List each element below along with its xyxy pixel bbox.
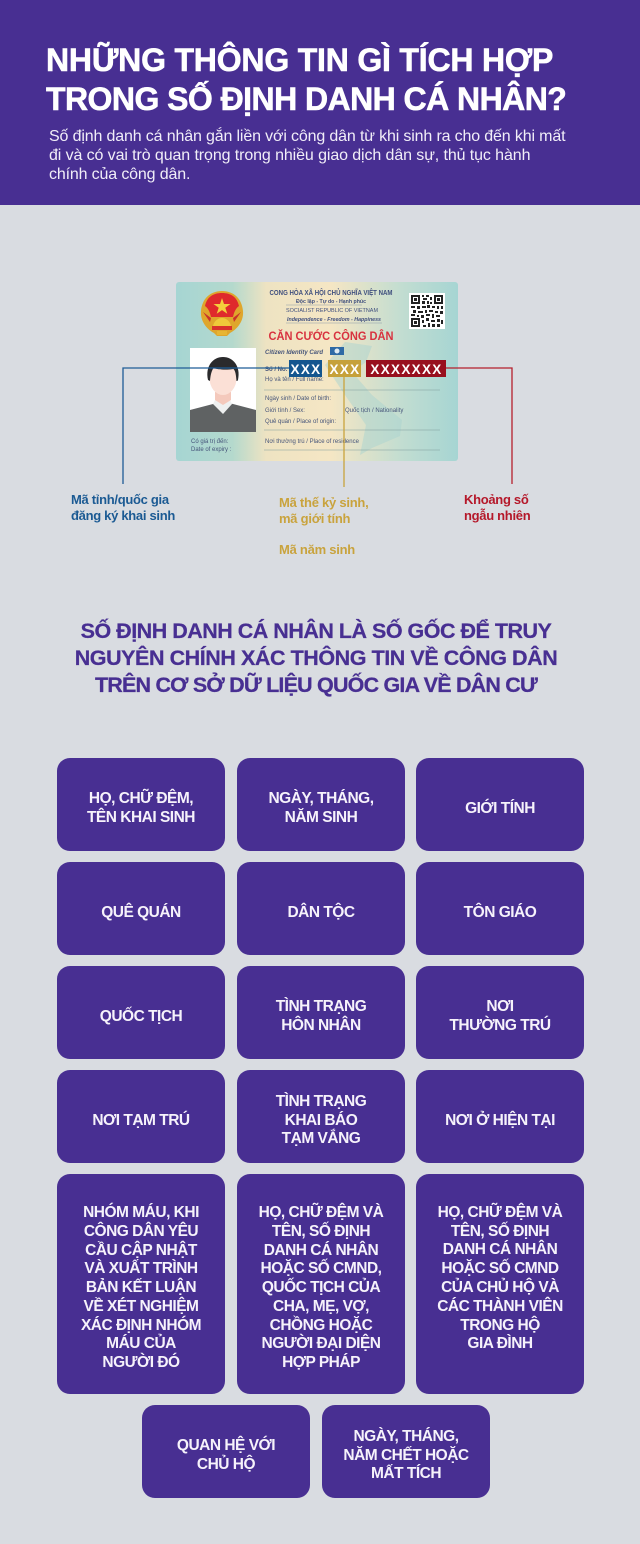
card background: [176, 282, 458, 461]
header banner: [0, 0, 640, 205]
label: century and gender code: mã giới tính: [279, 511, 350, 526]
tile: temporary absence: TÌNH TRẠNG: [276, 1093, 366, 1110]
intro text: Số định danh cá nhân gắn liền với công dân từ khi sinh ra cho đến khi mất: [49, 128, 565, 145]
card rules: [264, 390, 440, 450]
tile: date of birth: NGÀY, THÁNG,: [268, 790, 374, 807]
title: [46, 42, 566, 117]
tile: marital status: HÔN NHÂN: [281, 1017, 361, 1034]
tile: ethnicity: [237, 862, 405, 955]
tile: marital status: [237, 966, 405, 1059]
tile: blood type: BẢN KẾT LUẬN: [86, 1279, 196, 1296]
tile: full name: HỌ, CHỮ ĐỆM,: [89, 790, 193, 807]
card header text: Độc lập - Tự do - Hạnh phúc: [296, 299, 367, 305]
tile: blood type: NGƯỜI ĐÓ: [102, 1354, 180, 1371]
tile: permanent residence: NƠI: [486, 998, 514, 1015]
tile: date of death: NĂM CHẾT HOẶC: [343, 1447, 469, 1464]
tile: permanent residence: [416, 966, 584, 1059]
tile: date of death: MẤT TÍCH: [371, 1465, 441, 1482]
tile: date of death: [322, 1405, 490, 1498]
tile: blood type: CẦU CẬP NHẬT: [85, 1242, 197, 1258]
chip icon: [330, 347, 344, 355]
tile: blood type: NHÓM MÁU, KHI: [83, 1204, 199, 1221]
tile: household info: CÁC THÀNH VIÊN: [437, 1298, 563, 1315]
tile: nationality: [57, 966, 225, 1059]
tile: household info: TRONG HỘ: [460, 1317, 540, 1334]
tile: family members info: CHỒNG HOẶC: [270, 1317, 372, 1334]
card field text: Quê quán / Place of origin:: [265, 419, 336, 425]
card title: CĂN CƯỚC CÔNG DÂN: [268, 330, 394, 343]
code box: random: XXXXXXX: [370, 362, 443, 377]
leader line: gold: [343, 377, 345, 487]
card field text: Nơi thường trú / Place of residence: [265, 439, 360, 445]
tile: full name: TÊN KHAI SINH: [87, 809, 195, 826]
card header text: [270, 288, 393, 323]
tile: permanent residence: THƯỜNG TRÚ: [449, 1017, 551, 1034]
tile: temporary residence: [57, 1070, 225, 1163]
tile: blood type: CÔNG DÂN YÊU: [84, 1223, 198, 1240]
tile: religion: [416, 862, 584, 955]
card field text: Quốc tịch / Nationality: [345, 408, 403, 414]
QR code: [409, 293, 445, 329]
label: random digits: [464, 492, 530, 523]
tile: religion: TÔN GIÁO: [464, 904, 536, 921]
code box: province: XXX: [291, 362, 321, 377]
label: century and gender code: Mã thế kỷ sinh,: [279, 495, 368, 510]
card field text: [191, 350, 403, 453]
tile: household info: DANH CÁ NHÂN: [443, 1241, 557, 1258]
tile: household info: HỌ, CHỮ ĐỆM VÀ: [438, 1204, 562, 1221]
tile: blood type: VÀ XUẤT TRÌNH: [84, 1260, 198, 1277]
tile: gender: [416, 758, 584, 851]
tile: blood type: XÁC ĐỊNH NHÓM: [81, 1317, 201, 1334]
code box: century gender year: XXX: [330, 362, 360, 377]
tile: ethnicity: DÂN TỘC: [287, 904, 355, 921]
tile: family members info: HOẶC SỐ CMND,: [261, 1260, 381, 1277]
section heading: SỐ ĐỊNH DANH CÁ NHÂN LÀ SỐ GỐC ĐỂ TRUY: [81, 619, 551, 643]
emblem: [201, 291, 243, 336]
section heading: [75, 618, 557, 697]
intro text: chính của công dân.: [49, 166, 190, 183]
card field text: Giới tính / Sex:: [265, 408, 305, 414]
tile: household info: TÊN, SỐ ĐỊNH: [451, 1223, 549, 1240]
tile: relation to household head: [142, 1405, 310, 1498]
tile: family members info: HỢP PHÁP: [282, 1354, 360, 1371]
tile: temporary absence: KHAI BÁO: [285, 1112, 357, 1129]
card field text: Số / No:: [265, 366, 288, 373]
tile: marital status: TÌNH TRẠNG: [276, 998, 366, 1015]
tile: family members info: HỌ, CHỮ ĐỆM VÀ: [259, 1204, 383, 1221]
tile: household info: HOẶC SỐ CMND: [441, 1260, 559, 1277]
tile: date of birth: [237, 758, 405, 851]
intro text: [49, 127, 566, 183]
card header text: Independence - Freedom - Happiness: [287, 317, 382, 323]
section heading: NGUYÊN CHÍNH XÁC THÔNG TIN VỀ CÔNG DÂN: [75, 646, 557, 670]
tile: household info: [416, 1174, 584, 1394]
card field text: Họ và tên / Full name:: [265, 377, 324, 383]
card header text: CONG HÒA XÃ HỘI CHỦ NGHĨA VIỆT NAM: [270, 288, 393, 297]
tile: family members info: NGƯỜI ĐẠI DIỆN: [262, 1335, 380, 1352]
tile: relation to household head: QUAN HỆ VỚI: [177, 1437, 275, 1454]
intro text: đi và có vai trò quan trọng trong nhiều giao dịch dân sự, thủ tục hành: [49, 147, 530, 164]
tile: family members info: TÊN, SỐ ĐỊNH: [272, 1223, 370, 1240]
card field text: Có giá trị đến:: [191, 439, 229, 445]
tile: date of birth: NĂM SINH: [285, 809, 357, 826]
card field text: Date of expiry :: [191, 447, 232, 453]
tile: family members info: QUỐC TỊCH CỦA: [262, 1279, 380, 1296]
tile: blood type: MÁU CỦA: [106, 1335, 176, 1352]
tile: household info: CỦA CHỦ HỘ VÀ: [441, 1279, 559, 1296]
label: random digits: Khoảng số: [464, 492, 528, 507]
portrait: [190, 348, 256, 432]
card field text: Citizen Identity Card: [265, 350, 323, 356]
ID card diagram: [122, 282, 513, 487]
label: random digits: ngẫu nhiên: [464, 508, 530, 523]
tile: temporary absence: TẠM VẮNG: [282, 1130, 360, 1147]
tile: nationality: QUỐC TỊCH: [100, 1008, 182, 1025]
tile: relation to household head: CHỦ HỘ: [197, 1456, 255, 1473]
tile: hometown: QUÊ QUÁN: [101, 904, 181, 921]
label: province code: [71, 492, 175, 523]
tile: temporary absence: [237, 1070, 405, 1163]
title: TRONG SỐ ĐỊNH DANH CÁ NHÂN?: [46, 81, 566, 117]
card field text: Ngày sinh / Date of birth:: [265, 396, 331, 402]
label: birth year code: Mã năm sinh: [279, 542, 355, 557]
label: province code: đăng ký khai sinh: [71, 508, 175, 523]
tile: full name: [57, 758, 225, 851]
tile: family members info: CHA, MẸ, VỢ,: [273, 1298, 369, 1315]
tile: date of death: NGÀY, THÁNG,: [353, 1428, 459, 1445]
tile: blood type: [57, 1174, 225, 1394]
leader line: red: [446, 368, 512, 484]
map shape: [325, 342, 402, 455]
leader line: blue: [123, 368, 290, 484]
tile: gender: GIỚI TÍNH: [465, 800, 535, 817]
tile: temporary residence: NƠI TẠM TRÚ: [92, 1112, 190, 1129]
tile: household info: GIA ĐÌNH: [467, 1335, 533, 1352]
label: century and gender code: [279, 495, 368, 526]
tile: current residence: NƠI Ở HIỆN TẠI: [445, 1112, 555, 1129]
tile: hometown: [57, 862, 225, 955]
tile: blood type: VỀ XÉT NGHIỆM: [84, 1298, 198, 1315]
section heading: TRÊN CƠ SỞ DỮ LIỆU QUỐC GIA VỀ DÂN CƯ: [95, 673, 537, 697]
tile: family members info: DANH CÁ NHÂN: [264, 1242, 378, 1258]
card header text: SOCIALIST REPUBLIC OF VIETNAM: [286, 308, 378, 314]
title: NHỮNG THÔNG TIN GÌ TÍCH HỢP: [46, 42, 553, 78]
tile: family members info: [237, 1174, 405, 1394]
label: province code: Mã tỉnh/quốc gia: [71, 492, 169, 507]
tile: current residence: [416, 1070, 584, 1163]
